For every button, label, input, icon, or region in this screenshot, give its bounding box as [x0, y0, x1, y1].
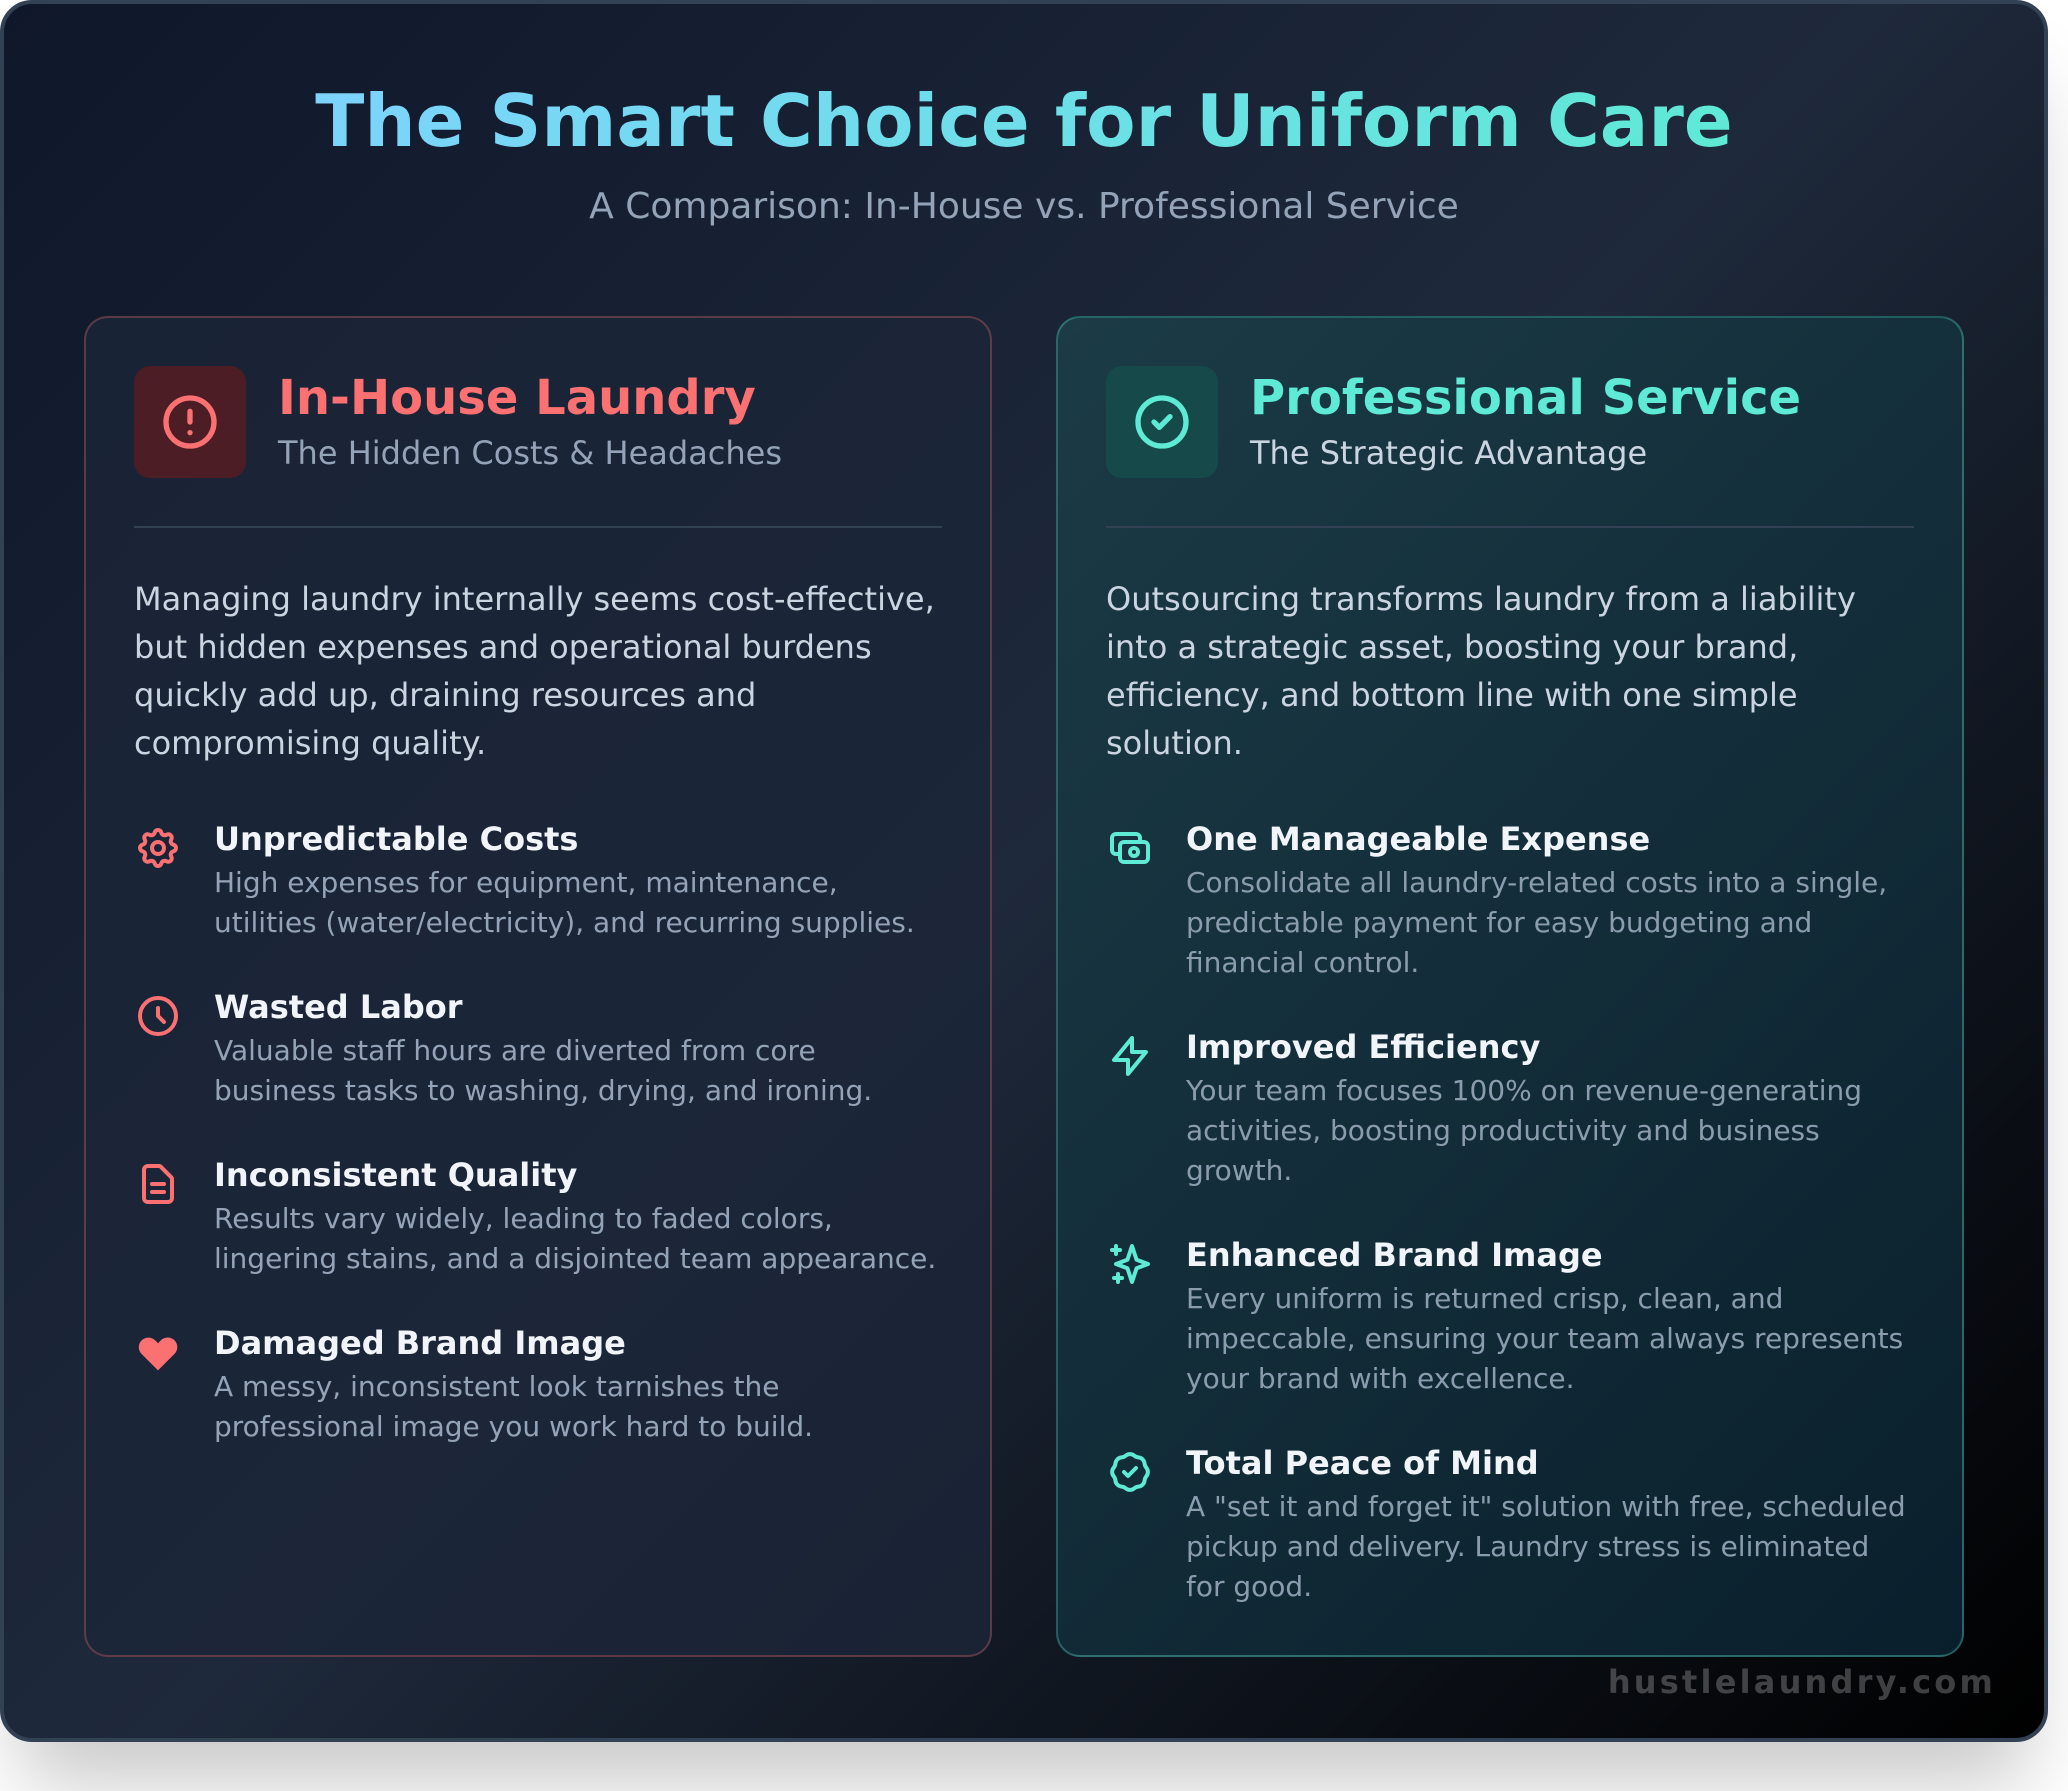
intro text: but hidden expenses and operational burdens	[134, 628, 872, 666]
panel subheading: The Strategic Advantage	[1250, 434, 1647, 472]
item description: utilities (water/electricity), and recurring supplies.	[214, 906, 915, 939]
item description: business tasks to washing, drying, and ironing.	[214, 1074, 872, 1107]
item description: Valuable staff hours are diverted from core	[214, 1034, 816, 1067]
item description	[1186, 1487, 1906, 1607]
item description: Consolidate all laundry-related costs into a single,	[1186, 866, 1887, 899]
item description	[1186, 863, 1887, 983]
title: The Smart Choice for Uniform Care	[315, 79, 1733, 163]
intro text: quickly add up, draining resources and	[134, 676, 756, 714]
item: improved efficiency	[1106, 1032, 1914, 1202]
item title: Wasted Labor	[214, 988, 462, 1026]
item: damaged brand image	[138, 1324, 813, 1443]
icon: clock	[138, 996, 178, 1036]
intro text: compromising quality.	[134, 724, 486, 762]
item description	[214, 1370, 813, 1443]
intro text: into a strategic asset, boosting your brand,	[1106, 628, 1798, 666]
item title: One Manageable Expense	[1186, 820, 1650, 858]
intro text	[134, 580, 935, 762]
intro text: efficiency, and bottom line with one simple	[1106, 676, 1798, 714]
item description: Results vary widely, leading to faded colors,	[214, 1202, 833, 1235]
item description: High expenses for equipment, maintenance,	[214, 866, 838, 899]
item title: Enhanced Brand Image	[1186, 1236, 1603, 1274]
item title: Damaged Brand Image	[214, 1324, 626, 1362]
item title: Inconsistent Quality	[214, 1156, 577, 1194]
item description: pickup and delivery. Laundry stress is eliminated	[1186, 1530, 1869, 1563]
item: inconsistent quality	[142, 1156, 936, 1275]
item description: impeccable, ensuring your team always represents	[1186, 1322, 1903, 1355]
item title: Unpredictable Costs	[214, 820, 578, 858]
item description: activities, boosting productivity and business	[1186, 1114, 1820, 1147]
icon: check	[1106, 366, 1218, 478]
intro text: solution.	[1106, 724, 1243, 762]
item description: A "set it and forget it" solution with free, scheduled	[1186, 1490, 1906, 1523]
icon: heart	[138, 1338, 178, 1370]
item description: professional image you work hard to build.	[214, 1410, 813, 1443]
item: one manageable expense	[1106, 824, 1914, 994]
icon: cash	[1106, 824, 1154, 872]
icon: badge check	[1106, 1448, 1154, 1496]
icon: lightning bolt	[1106, 1032, 1154, 1080]
intro text: Outsourcing transforms laundry from a liability	[1106, 580, 1856, 618]
icon: gear	[138, 828, 178, 868]
item description: lingering stains, and a disjointed team appearance.	[214, 1242, 936, 1275]
item: unpredictable costs	[138, 820, 915, 939]
item description: A messy, inconsistent look tarnishes the	[214, 1370, 780, 1403]
item description	[214, 1202, 936, 1275]
intro text: Managing laundry internally seems cost-effective,	[134, 580, 935, 618]
item title: Improved Efficiency	[1186, 1028, 1540, 1066]
item: enhanced brand image	[1106, 1240, 1914, 1410]
item: wasted labor	[138, 988, 872, 1107]
subtitle: A Comparison: In-House vs. Professional Service	[589, 186, 1459, 227]
item: total peace of mind	[1106, 1448, 1914, 1618]
panel: in-house laundry	[84, 316, 992, 1657]
item description: for good.	[1186, 1570, 1312, 1603]
panel subheading: The Hidden Costs & Headaches	[278, 434, 782, 472]
item description	[214, 1034, 872, 1107]
item description	[1186, 1071, 1862, 1191]
intro text	[1106, 575, 1856, 767]
item description: your brand with excellence.	[1186, 1362, 1575, 1395]
item description: predictable payment for easy budgeting and	[1186, 906, 1812, 939]
watermark: hustlelaundry.com	[1608, 1663, 1996, 1701]
item description: Your team focuses 100% on revenue-generating	[1186, 1074, 1862, 1107]
panel heading: In-House Laundry	[278, 370, 756, 426]
item description: financial control.	[1186, 946, 1419, 979]
panel heading: Professional Service	[1250, 370, 1801, 426]
icon: document	[142, 1164, 174, 1204]
icon: warning	[134, 366, 246, 478]
icon: sparkles	[1106, 1240, 1154, 1288]
panel: professional service	[1056, 316, 1964, 1657]
item description: Every uniform is returned crisp, clean, and	[1186, 1282, 1783, 1315]
item description	[214, 866, 915, 939]
item description: growth.	[1186, 1154, 1292, 1187]
item description	[1186, 1279, 1903, 1399]
item title: Total Peace of Mind	[1186, 1444, 1539, 1482]
